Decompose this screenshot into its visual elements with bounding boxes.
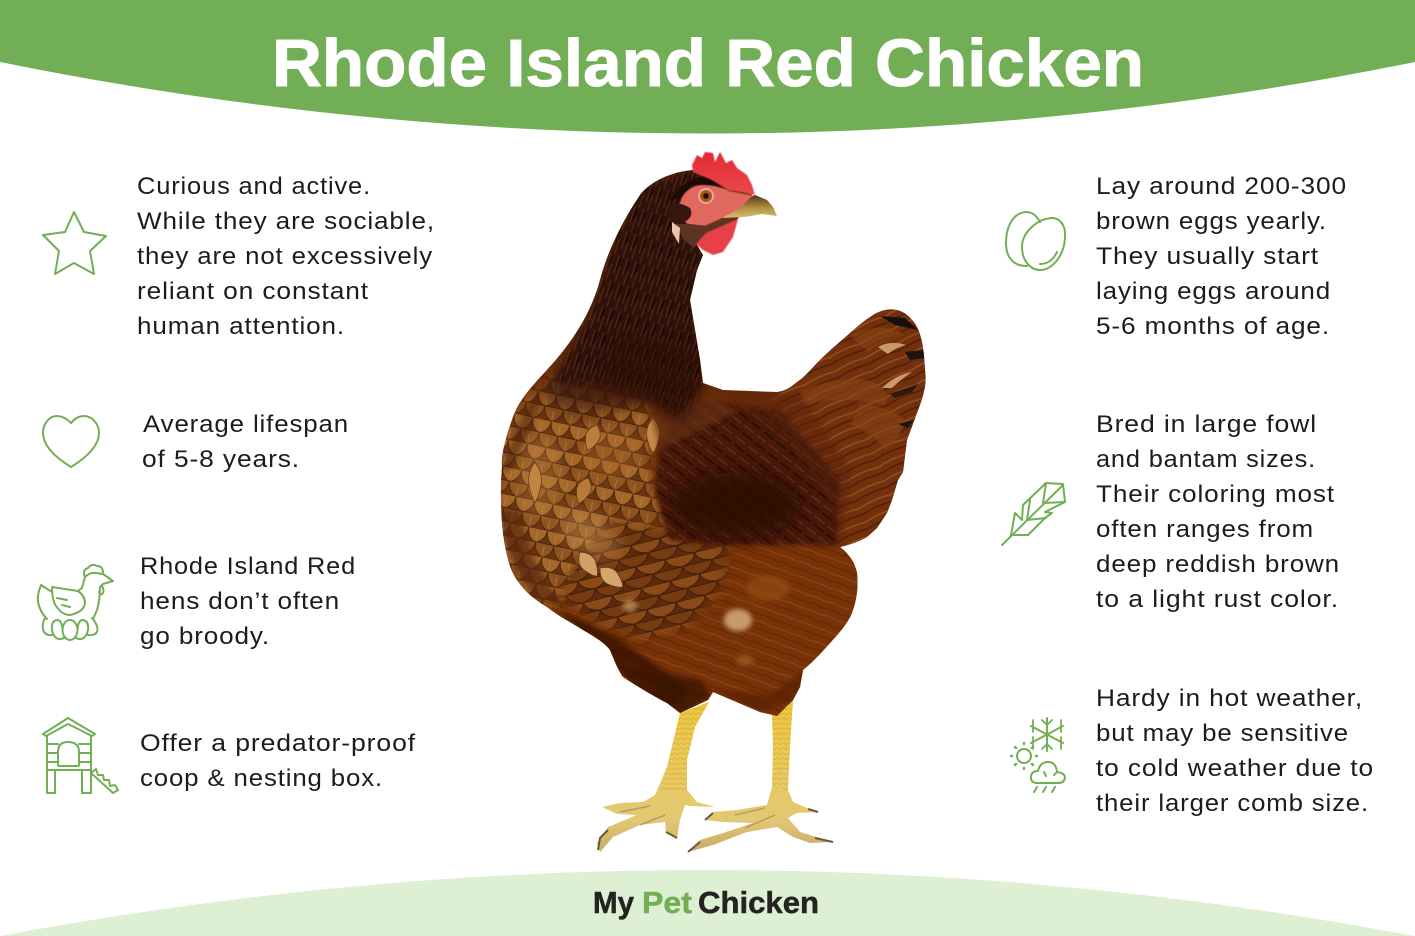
text: egg laying: 5-6 months of age.	[1096, 313, 1330, 340]
face	[676, 185, 755, 226]
text: climate: but may be sensitive	[1096, 720, 1349, 747]
text: broodiness: Rhode Island Red	[140, 553, 356, 580]
text: egg laying: brown eggs yearly.	[1096, 208, 1327, 235]
panel: size and coloring	[1002, 411, 1340, 613]
breast colour variation	[500, 372, 654, 605]
text: size and coloring: Bred in large fowl	[1096, 411, 1317, 438]
ear	[668, 204, 691, 224]
text: lifespan: of 5-8 years.	[142, 446, 300, 473]
highlights	[623, 575, 790, 666]
text: size and coloring: Their coloring most	[1096, 481, 1335, 508]
lower body feathers	[508, 544, 858, 716]
text: temperament	[137, 173, 435, 340]
chicken legs and feet	[597, 700, 833, 852]
icon: hen on eggs	[38, 565, 113, 640]
logo: My Pet Chicken: Pet	[642, 885, 692, 920]
beak	[722, 195, 777, 218]
comb	[692, 152, 755, 195]
cheek feathers	[676, 218, 732, 248]
icon: heart	[43, 416, 99, 467]
text: climate: Hardy in hot weather,	[1096, 685, 1363, 712]
chicken illustration	[480, 150, 950, 852]
text: lifespan: Average lifespan	[143, 411, 349, 438]
text: egg laying: Lay around 200-300	[1096, 173, 1347, 200]
neck hackle feathers	[548, 170, 711, 424]
text: temperament: Curious and active.	[137, 173, 371, 200]
text: lifespan	[142, 411, 349, 473]
mid wing feathers	[554, 516, 734, 644]
text: broodiness: hens don’t often	[140, 588, 340, 615]
header banner	[0, 0, 1415, 134]
text: size and coloring: deep reddish brown	[1096, 551, 1340, 578]
footer band	[0, 870, 1415, 936]
chicken head	[668, 152, 777, 255]
dark back patch	[652, 400, 842, 548]
text: size and coloring: often ranges from	[1096, 516, 1314, 543]
text: housing: coop & nesting box.	[140, 765, 383, 792]
text: temperament: they are not excessively	[137, 243, 433, 270]
icon: star	[43, 212, 106, 274]
bright accent feathers	[529, 418, 659, 593]
icon: weather	[1011, 718, 1065, 792]
icon: coop	[43, 718, 118, 793]
tail tips	[880, 316, 918, 330]
logo: My Pet Chicken: My	[593, 885, 635, 920]
text: temperament: human attention.	[137, 313, 345, 340]
panel: lifespan	[43, 411, 349, 473]
icon: eggs	[1006, 212, 1065, 270]
logo: My Pet Chicken: Chicken	[698, 885, 819, 920]
text: broodiness	[140, 553, 356, 650]
logo: My Pet Chicken	[593, 885, 819, 920]
text: egg laying: laying eggs around	[1096, 278, 1331, 305]
eye	[698, 188, 714, 204]
panel: egg laying	[1006, 173, 1347, 340]
panel: temperament	[43, 173, 435, 340]
text: climate: their larger comb size.	[1096, 790, 1369, 817]
text: size and coloring	[1096, 411, 1340, 613]
chicken body plumage	[500, 170, 926, 716]
text: climate: to cold weather due to	[1096, 755, 1374, 782]
text: housing	[140, 730, 416, 792]
tail feathers	[771, 309, 926, 548]
text: size and coloring: and bantam sizes.	[1096, 446, 1316, 473]
icon: feather	[1002, 483, 1065, 545]
panel: housing	[43, 718, 416, 793]
text: temperament: While they are sociable,	[137, 208, 435, 235]
text: egg laying: They usually start	[1096, 243, 1319, 270]
text: egg laying	[1096, 173, 1347, 340]
panel: climate	[1011, 685, 1374, 817]
head cap	[670, 176, 735, 200]
text: size and coloring: to a light rust color.	[1096, 586, 1339, 613]
text: broodiness: go broody.	[140, 623, 270, 650]
large tail coverts	[800, 328, 905, 450]
panel: broodiness	[38, 553, 356, 650]
text: housing: Offer a predator-proof	[140, 730, 416, 757]
breast scale feathers	[500, 372, 666, 610]
text: temperament: reliant on constant	[137, 278, 369, 305]
dark bottom edge	[562, 610, 686, 708]
title: Rhode Island Red Chicken	[272, 26, 1144, 101]
wattle	[696, 219, 738, 255]
text: climate	[1096, 685, 1374, 817]
